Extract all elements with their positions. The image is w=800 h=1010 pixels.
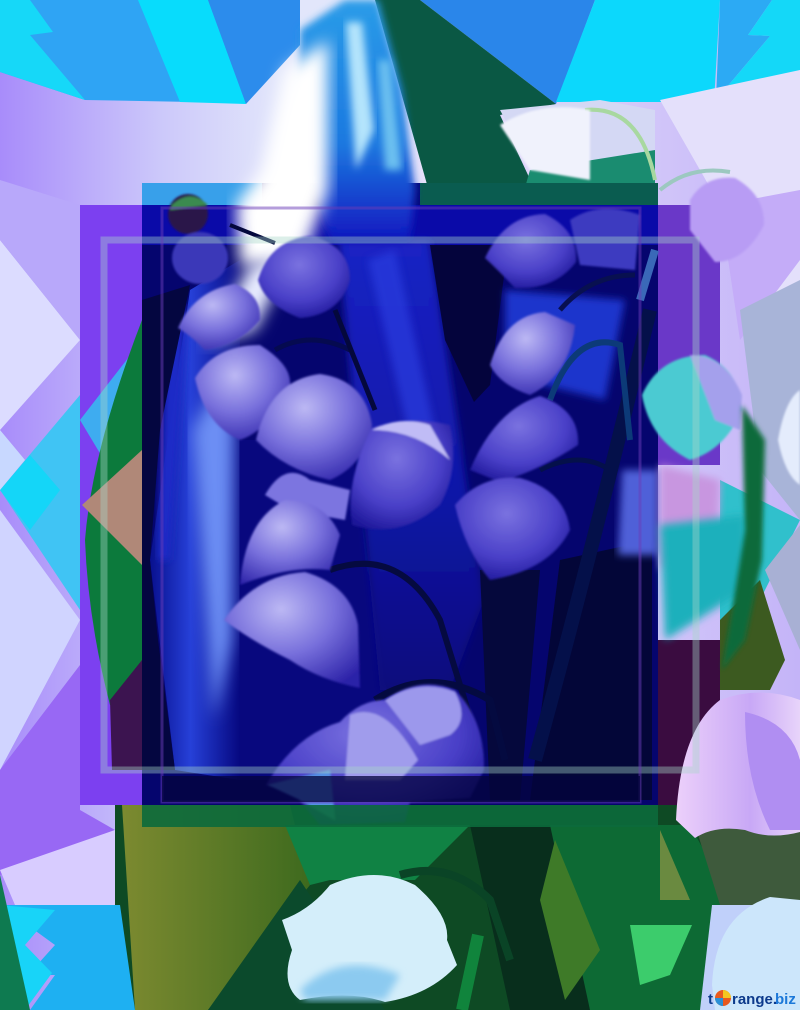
flower cluster bottom centre <box>266 684 484 825</box>
top band: cyan and blue facets right <box>420 0 800 104</box>
central leaf: green upper <box>375 0 655 205</box>
dark central gap and stems <box>230 110 730 800</box>
bell 1 <box>258 236 350 318</box>
bell 7 <box>240 500 340 585</box>
translucent frame lines <box>104 208 696 827</box>
watermark: torange.biz: range. <box>732 991 777 1008</box>
bell bottom right <box>712 897 800 1010</box>
main dark blue picture panel <box>142 183 658 805</box>
bell right 2 <box>490 312 575 395</box>
top band: cyan and blue facets left <box>0 0 300 104</box>
large bell right <box>676 692 800 838</box>
bell 5 dark <box>351 421 453 530</box>
lavender facets left edge <box>0 180 120 905</box>
purple outer frame and green left leaf <box>80 205 720 805</box>
bell right 1 <box>485 214 576 288</box>
bell 8 <box>224 572 360 688</box>
bell 4 large <box>256 374 372 480</box>
left leaf with light streaks <box>142 240 625 780</box>
bottom corner facets <box>0 875 800 1010</box>
bud top <box>168 194 208 234</box>
watermark: torange.biz: t <box>708 991 713 1008</box>
watermark: torange.biz: biz <box>775 991 796 1008</box>
bell right top dim <box>570 209 640 270</box>
bell right 3 <box>470 396 578 482</box>
lavender facets right edge <box>660 70 800 690</box>
bell 3 <box>195 345 290 440</box>
bottom leaf panel: olive and green <box>115 800 800 1010</box>
bell 2 <box>178 284 260 350</box>
white bell bottom centre <box>282 871 510 1010</box>
watermark: torange.biz <box>708 990 796 1008</box>
bell 6 <box>265 473 350 520</box>
flower bells: right stalk <box>455 209 640 580</box>
bell right 4 <box>455 478 570 580</box>
bud second <box>172 232 228 284</box>
flower bells: left stalk <box>168 194 453 688</box>
flowers: outside right <box>500 107 800 670</box>
light streak upper leaf <box>205 0 415 345</box>
